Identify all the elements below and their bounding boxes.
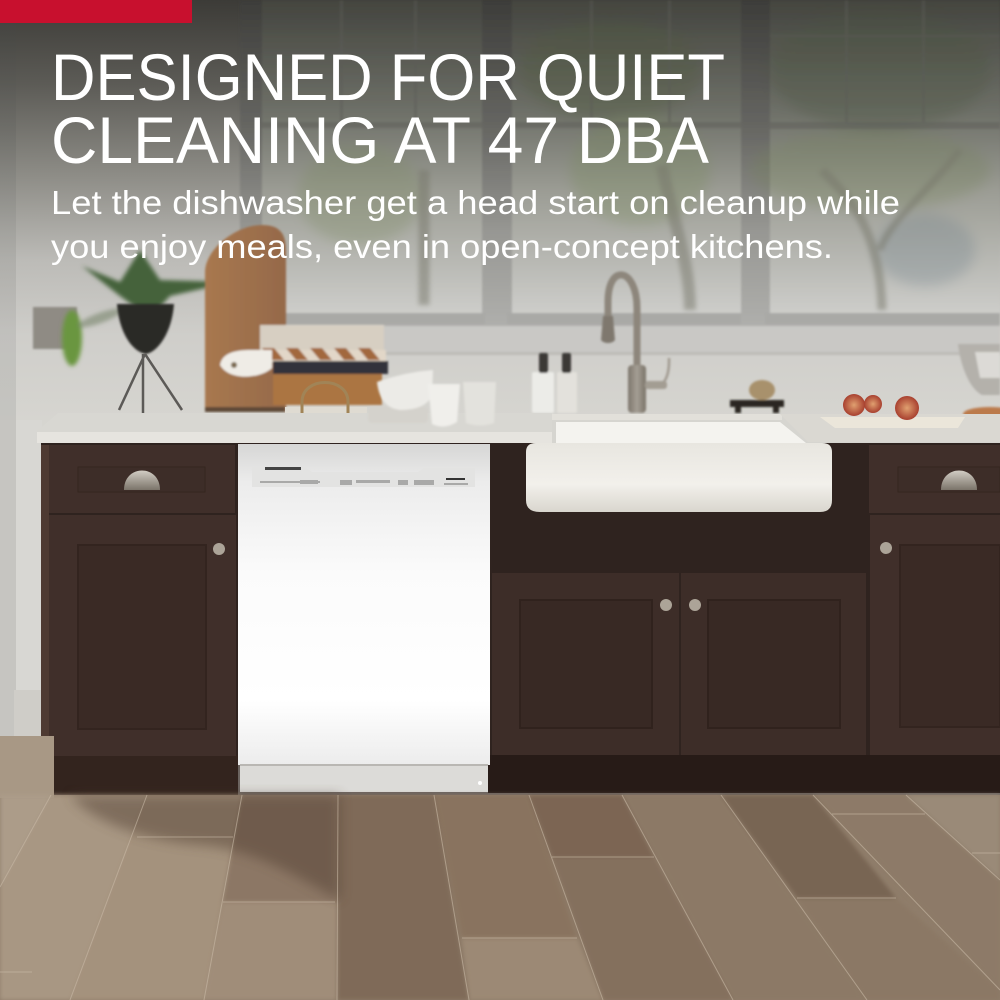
dishes and cups bbox=[368, 370, 496, 427]
icon: potted plant bbox=[62, 250, 232, 415]
drawer left bbox=[49, 445, 235, 513]
drawer right bbox=[869, 445, 1000, 513]
cabinet door right bbox=[870, 515, 1000, 755]
window sashes bbox=[262, 0, 1000, 129]
cabinet door left bbox=[49, 515, 236, 756]
wall background bbox=[0, 0, 1000, 445]
door under sink right bbox=[681, 573, 866, 755]
title: CLEANING AT 47 DBA bbox=[51, 103, 709, 177]
soap bottles bbox=[532, 353, 577, 413]
accent bar bbox=[0, 0, 192, 23]
base cabinets bbox=[41, 443, 1000, 795]
toe kick right bbox=[488, 755, 1000, 793]
title: DESIGNED FOR QUIET bbox=[51, 40, 725, 114]
wall outlet bbox=[33, 307, 77, 349]
subtitle: Let the dishwasher get a head start on cleanup while bbox=[51, 184, 900, 221]
window group bbox=[240, 0, 1000, 355]
floor shadow bbox=[70, 795, 340, 900]
farmhouse sink bbox=[526, 443, 832, 512]
tray with figurine bbox=[730, 380, 784, 413]
window panes bbox=[262, 0, 1000, 314]
window bottom frames bbox=[262, 313, 1000, 324]
trees outside bbox=[298, 10, 990, 310]
floor planks bbox=[0, 795, 1000, 1000]
sink basin interior bbox=[556, 422, 806, 443]
door under sink left bbox=[492, 573, 679, 755]
toe kick left bbox=[54, 755, 238, 795]
subtitle bbox=[51, 184, 900, 265]
left wall trim bbox=[0, 0, 42, 736]
subtitle: you enjoy meals, even in open-concept kitchens. bbox=[51, 228, 833, 265]
floor seams bbox=[0, 795, 1000, 1000]
control panel bbox=[252, 467, 475, 487]
stand mixer bbox=[958, 344, 1000, 421]
brass holder bbox=[285, 382, 367, 416]
fruit on board bbox=[820, 394, 965, 428]
window sill bbox=[240, 326, 1000, 352]
wood floor bbox=[0, 736, 1000, 1000]
countertop bbox=[37, 413, 1000, 443]
title bbox=[51, 40, 725, 177]
faucet bbox=[601, 275, 669, 413]
dishwasher bbox=[238, 444, 490, 792]
cutting boards bbox=[205, 225, 388, 412]
